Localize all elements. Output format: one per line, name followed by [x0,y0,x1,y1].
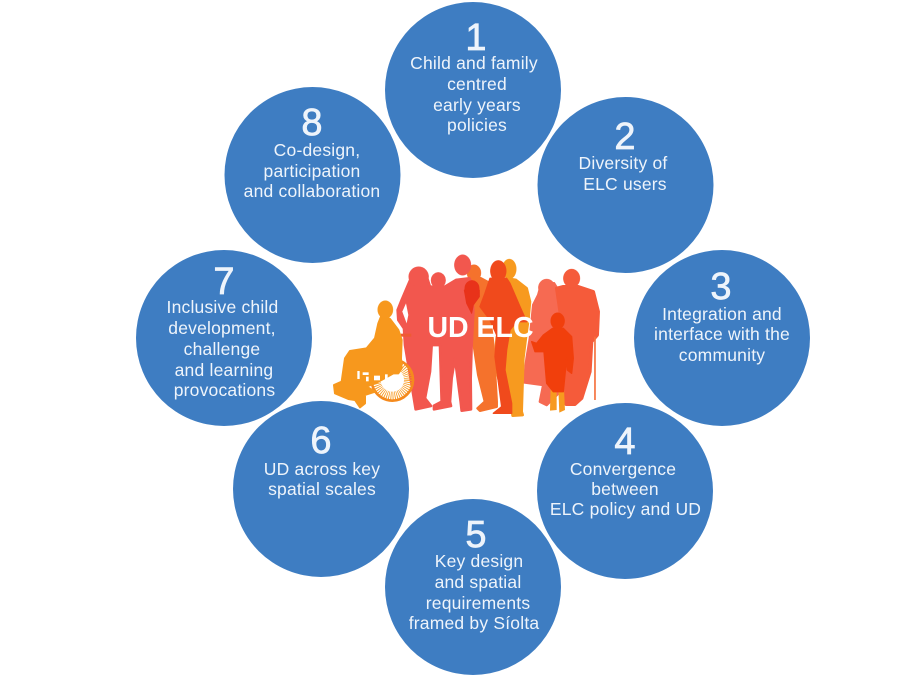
panel: circle 7 inclusive child development: and learning [175,360,273,380]
panel: circle 3 integration and interface [634,250,810,426]
panel: circle 7 inclusive child development [136,250,312,426]
panel: circle 3 integration and interface: interface with the [654,324,790,344]
label: UD ELC: UD ELC [427,312,534,344]
panel: circle 8 co-design: Co-design, [274,140,360,160]
panel: circle 2 diversity of ELC users: 2 [614,116,636,158]
panel: circle 6 UD across spatial scales: UD across key [264,459,380,479]
panel: circle 1 child and family centred policies [385,2,561,178]
panel: circle 5 key design [385,499,561,675]
icon: wheel [372,359,413,401]
panel: circle 7 inclusive child development: development, [168,318,276,338]
panel: circle 3 integration and interface: Integration and [662,304,782,324]
panel: circle 7 inclusive child development: challenge [184,339,260,359]
panel: circle 8 co-design: and collaboration [244,181,380,201]
panel: circle 7 inclusive child development: 7 [213,261,235,303]
icon: orange man in back [495,259,530,416]
icon: armrest [401,334,411,337]
icon: child legs [550,388,565,413]
icon: woman, child and man in red [398,255,473,411]
icon: dark orange man [467,265,497,411]
decorative gap under the woman's arm [402,303,408,323]
panel: circle 1 child and family centred policies: Child and family [410,53,538,73]
panel: circle 1 child and family centred policies: policies [447,115,507,135]
panel: circle 7 inclusive child development: provocations [174,380,275,400]
panel: circle 2 diversity of ELC users: Diversity of [579,153,667,173]
decorative speckles in the wheelchair frame [357,371,392,381]
panel: circle 5 key design: Key design [435,551,523,571]
panel: circle 5 key design: and spatial [435,572,521,592]
panel: circle 3 integration and interface: community [679,345,765,365]
panel: circle 1 child and family centred policies: early years [433,95,521,115]
icon: infant [464,280,479,313]
icon: front woman [480,260,527,413]
panel: circle 1 child and family centred policies: centred [447,74,507,94]
panel: circle 4 convergence: ELC policy and UD [550,499,701,519]
panel: circle 5 key design: 5 [465,514,487,556]
icon: cane [592,337,597,400]
panel: circle 8 co-design: 8 [301,102,323,144]
panel: circle 2 diversity of ELC users: ELC users [583,174,667,194]
panel: circle 5 key design: requirements [426,593,530,613]
panel: circle 4 convergence: Convergence [570,459,676,479]
panel: circle 7 inclusive child development: Inclusive child [167,297,278,317]
panel: circle 8 co-design: participation [264,161,360,181]
icon: older woman [524,279,563,405]
panel: circle 4 convergence [537,403,713,579]
icon: child in front [532,313,573,392]
panel: circle 5 key design: framed by Síolta [409,613,539,633]
panel: circle 4 convergence: between [591,479,659,499]
panel: circle 8 co-design [224,87,400,263]
panel: circle 2 diversity of ELC users [538,97,714,273]
panel: circle 6 UD across spatial scales: spatial scales [268,479,376,499]
panel: circle 6 UD across spatial scales: 6 [310,420,332,462]
central illustration: people silhouettes with UD ELC label [334,255,598,416]
panel: circle 4 convergence: 4 [614,421,636,463]
icon: older man with cane [557,269,598,404]
icon: wheelchair user [334,301,402,407]
panel: circle 3 integration and interface: 3 [710,266,732,308]
panel: circle 6 UD across spatial scales [233,401,409,577]
panel: circle 1 child and family centred policies: 1 [465,17,487,59]
